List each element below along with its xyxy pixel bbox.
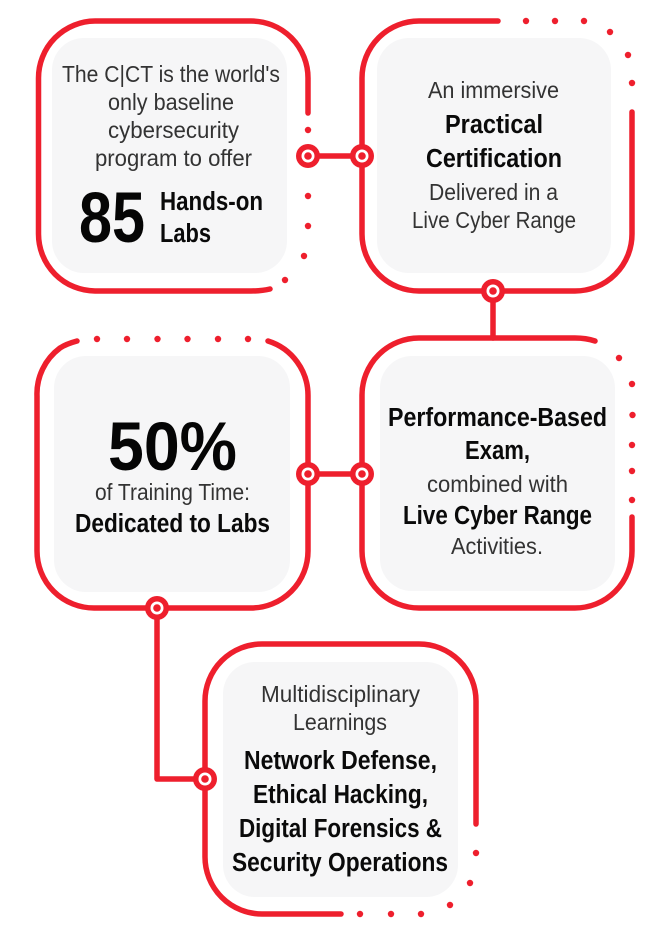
dashed red frame [362, 338, 632, 608]
frame dots [357, 850, 479, 917]
card background [54, 356, 290, 592]
text block: Ethical Hacking, [253, 781, 428, 809]
text block: cybersecurity [108, 117, 239, 143]
text block: Exam, [465, 437, 530, 465]
card background [52, 38, 287, 273]
text block: Activities. [451, 533, 543, 559]
text block: Multidisciplinary [261, 681, 420, 707]
text block [388, 404, 607, 559]
text block: Security Operations [232, 849, 448, 877]
text block: Practical [445, 111, 543, 139]
text block [75, 408, 270, 538]
frame dots [616, 355, 636, 503]
text block: An immersive [428, 77, 559, 103]
text block: Digital Forensics & [239, 815, 442, 843]
text block: Live Cyber Range [403, 502, 592, 530]
text block: Performance-Based [388, 404, 607, 432]
text block: 85 [79, 179, 145, 258]
text block: program to offer [95, 145, 252, 171]
text block [412, 77, 576, 233]
frame dots [94, 336, 251, 342]
text block: only baseline [108, 89, 234, 115]
dashed red frame [38, 21, 308, 291]
panel: 50% of training time [37, 336, 308, 608]
text block: combined with [427, 471, 568, 497]
panel: 85 hands-on labs [38, 21, 311, 291]
text block [232, 681, 448, 877]
text block: Delivered in a [429, 179, 559, 205]
dashed red frame [362, 21, 632, 291]
panel: multidisciplinary learnings [205, 644, 479, 917]
card background [380, 356, 615, 591]
panel: performance-based exam [362, 338, 636, 608]
text block: Certification [426, 145, 562, 173]
connector lines [157, 156, 493, 779]
text block: Dedicated to Labs [75, 510, 270, 538]
text block [62, 61, 280, 258]
text block: of Training Time: [95, 479, 250, 505]
frame dots [523, 18, 635, 86]
text block: Labs [160, 220, 211, 248]
frame dots [282, 127, 311, 283]
text block: Hands-on [160, 188, 263, 216]
text block: Live Cyber Range [412, 207, 576, 233]
connector nodes [145, 144, 505, 791]
dashed red frame [37, 341, 308, 608]
text block: Learnings [293, 709, 387, 735]
card background [377, 38, 611, 273]
panel: practical certification [362, 18, 635, 291]
text block: Network Defense, [244, 747, 437, 775]
text block: The C|CT is the world's [62, 61, 280, 87]
dashed red frame [205, 644, 476, 914]
card background [223, 662, 458, 897]
text block: 50% [108, 408, 237, 485]
